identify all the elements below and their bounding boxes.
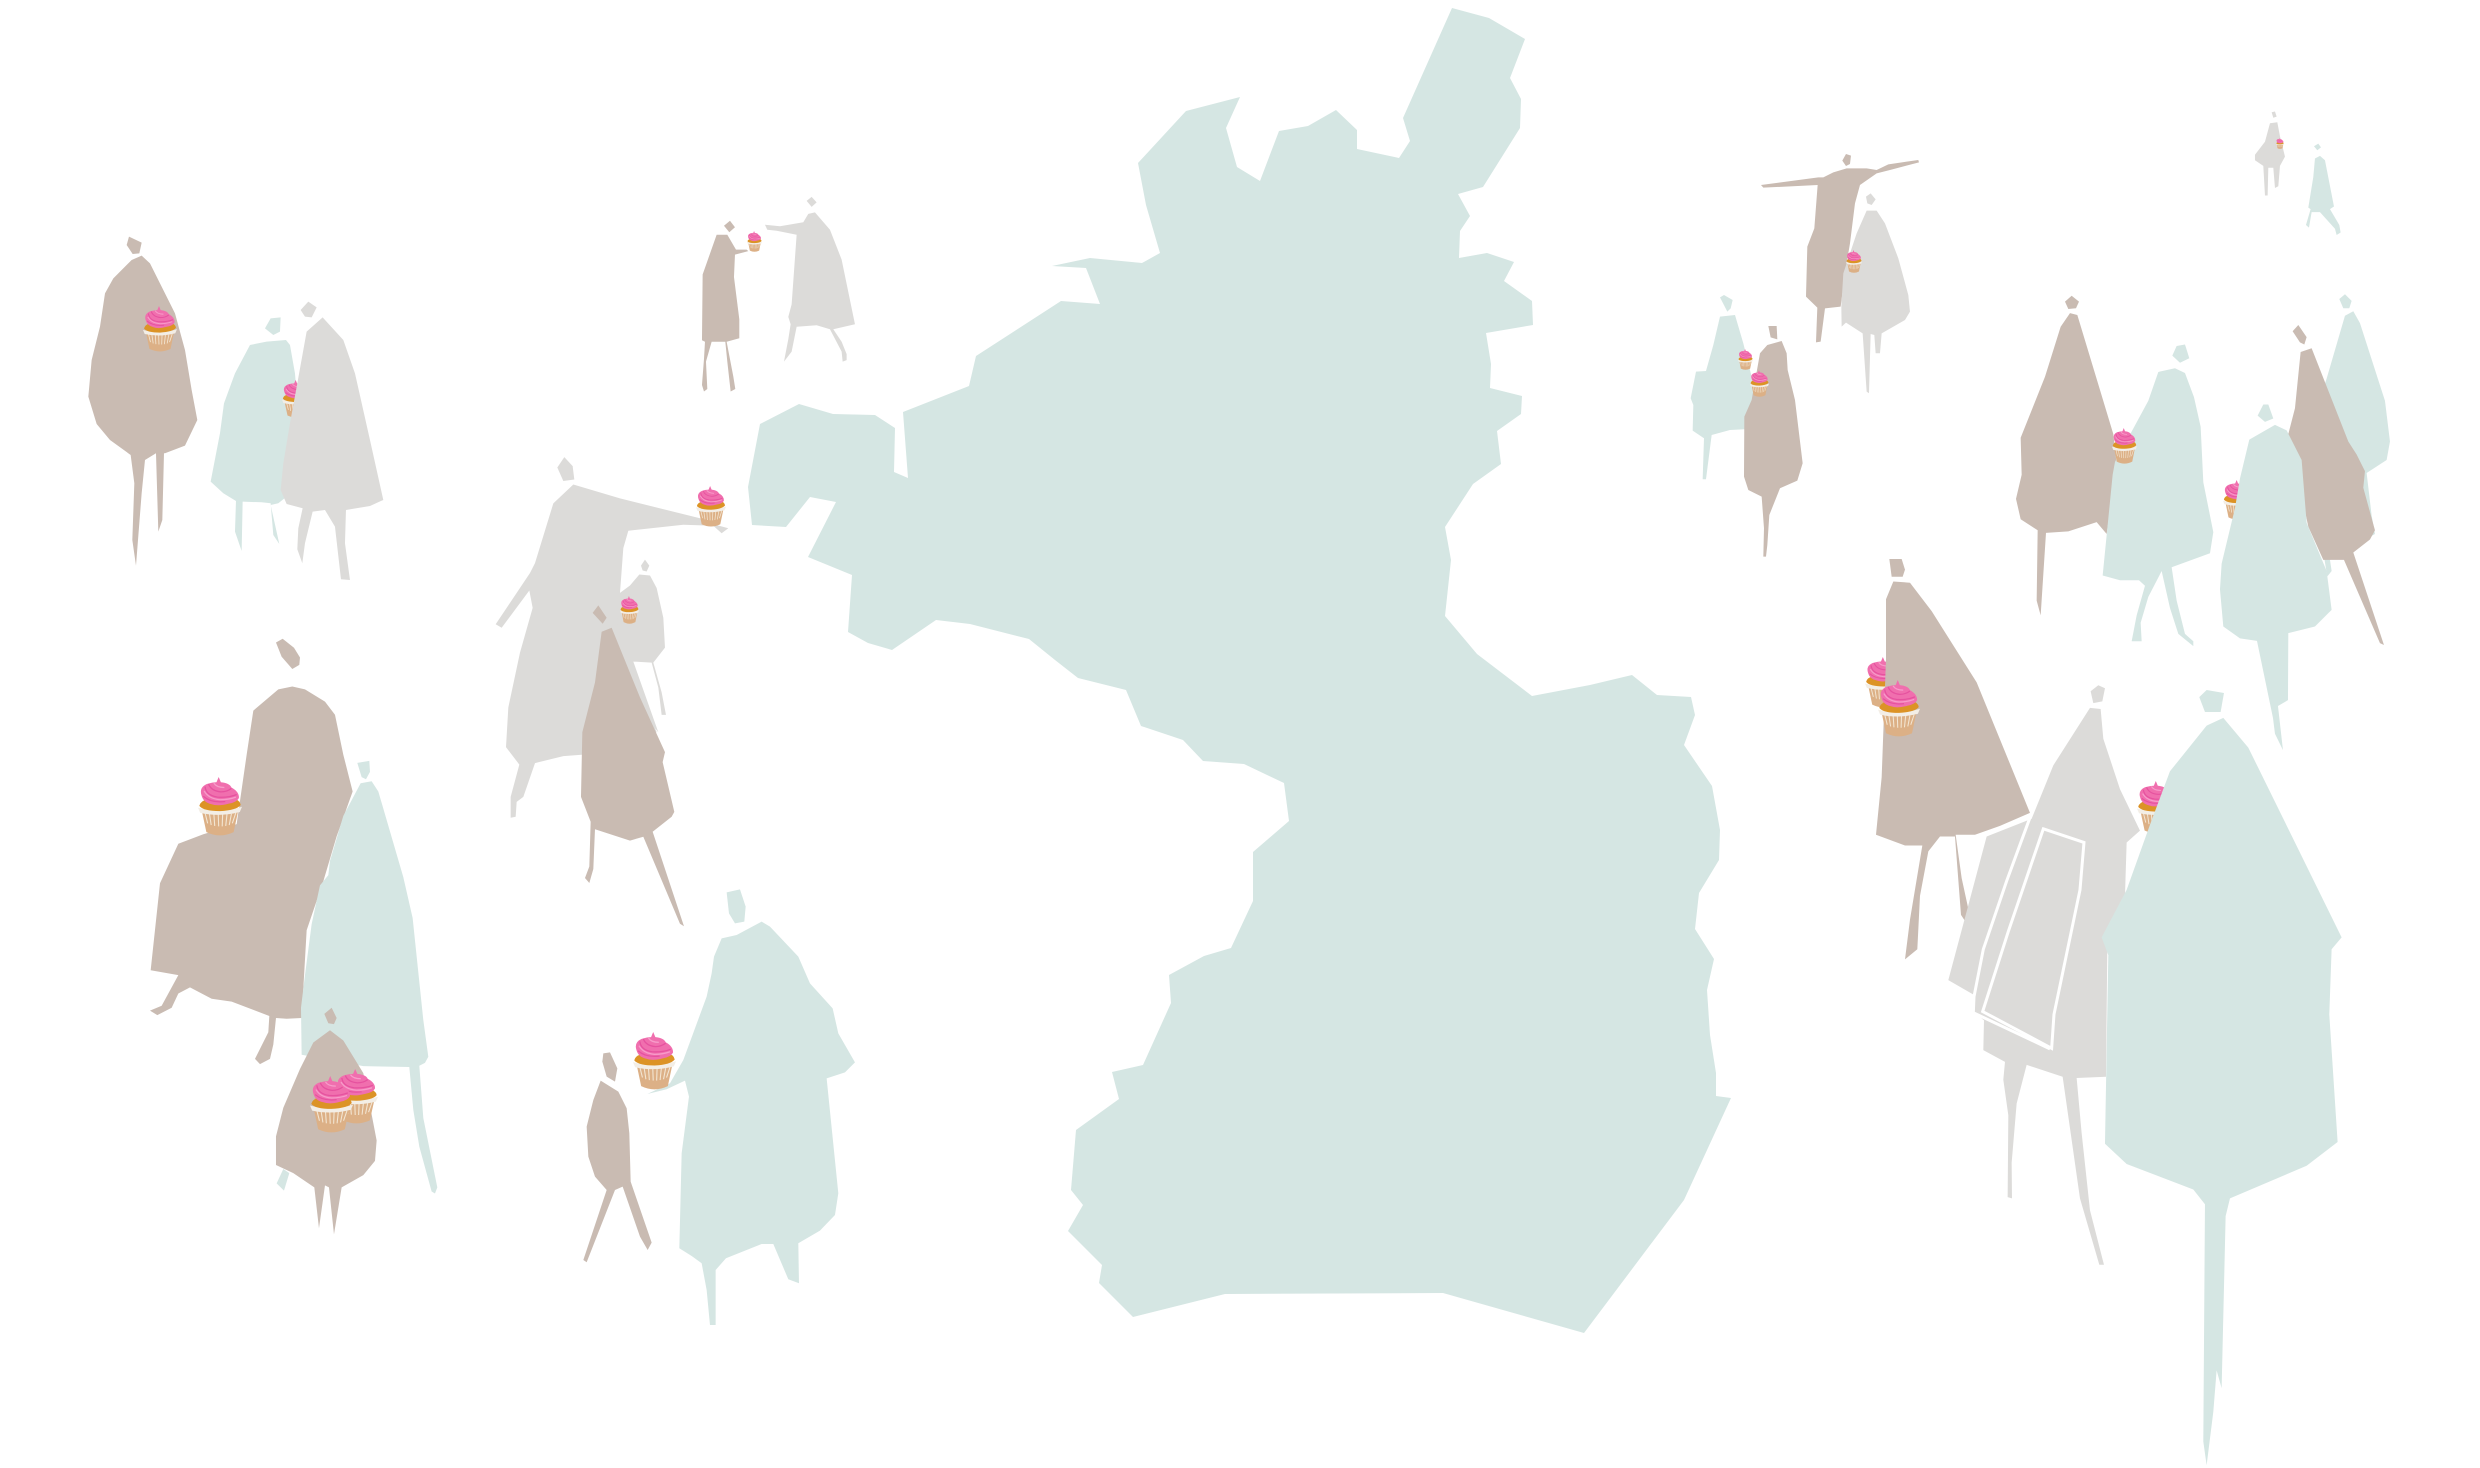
figure: teal walking person — [2103, 345, 2213, 646]
icon: cupcake — [1846, 250, 1862, 273]
icon: cupcake — [747, 231, 762, 252]
group: figures far right — [2016, 294, 2390, 750]
figure: taupe person — [2016, 296, 2117, 615]
icon: cupcake — [1750, 370, 1769, 397]
figure: small taupe child — [583, 1052, 652, 1262]
icon: cupcake — [1738, 349, 1753, 370]
figure: taupe person — [1744, 326, 1803, 557]
icon: cupcake — [198, 777, 242, 835]
icon: cupcake front — [310, 1076, 353, 1132]
figure: taupe person with long leg — [2288, 325, 2384, 645]
group: figures right of map — [1691, 154, 1919, 557]
group: two small figures exchanging cupcake — [702, 197, 855, 391]
figure: large taupe person — [150, 639, 353, 1064]
icon: cupcake — [2276, 138, 2284, 149]
figure: teal person front — [2220, 404, 2332, 750]
group: tiny distant figures — [2255, 111, 2341, 235]
icon: cupcake — [620, 596, 639, 624]
figure: tiny grey person — [2255, 111, 2285, 195]
icon: cupcake — [2112, 428, 2137, 464]
figure: tiny teal person — [2306, 144, 2341, 235]
figure: large grey person with outstretched arm — [496, 457, 728, 818]
group: three figures upper left — [88, 237, 383, 580]
figure: taupe person with arms spread — [1761, 154, 1919, 342]
icon: cupcake behind taupe person — [1865, 657, 1903, 707]
icon: cupcake front — [1878, 680, 1920, 736]
icon: cupcake on outstretched hand — [696, 486, 726, 527]
icon: cupcake — [633, 1032, 676, 1089]
figure: teal adult — [647, 889, 855, 1325]
figure: small taupe person — [702, 221, 748, 391]
figure: far right teal person — [2300, 294, 2390, 577]
map landmass — [748, 8, 1731, 1333]
figure: largest teal person — [2102, 690, 2342, 1465]
icon: cupcake — [2223, 480, 2252, 520]
figure: grey person — [1841, 193, 1910, 393]
figure: grey person — [281, 302, 383, 580]
figure: teal person — [211, 317, 300, 551]
icon: cupcake — [282, 380, 311, 418]
figure: large taupe person — [1876, 559, 2030, 959]
figure: small grey person — [765, 197, 855, 362]
figure: large grey person with outlined coat — [1948, 685, 2140, 1265]
group: adult and child with cupcake — [583, 889, 855, 1325]
figure: small taupe person — [276, 1008, 377, 1234]
group: three figures centre left — [496, 457, 728, 926]
figure: small grey person behind — [613, 560, 666, 732]
figure: taupe person — [581, 605, 684, 926]
icon: cupcake — [2137, 781, 2177, 833]
figure: teal person — [277, 761, 437, 1194]
figure: taupe person with cupcake — [88, 237, 197, 566]
icon: cupcake back — [335, 1069, 378, 1123]
group: large foreground figures — [1865, 559, 2342, 1465]
figure: teal person — [1691, 295, 1755, 479]
group: three figures lower left — [150, 639, 437, 1234]
